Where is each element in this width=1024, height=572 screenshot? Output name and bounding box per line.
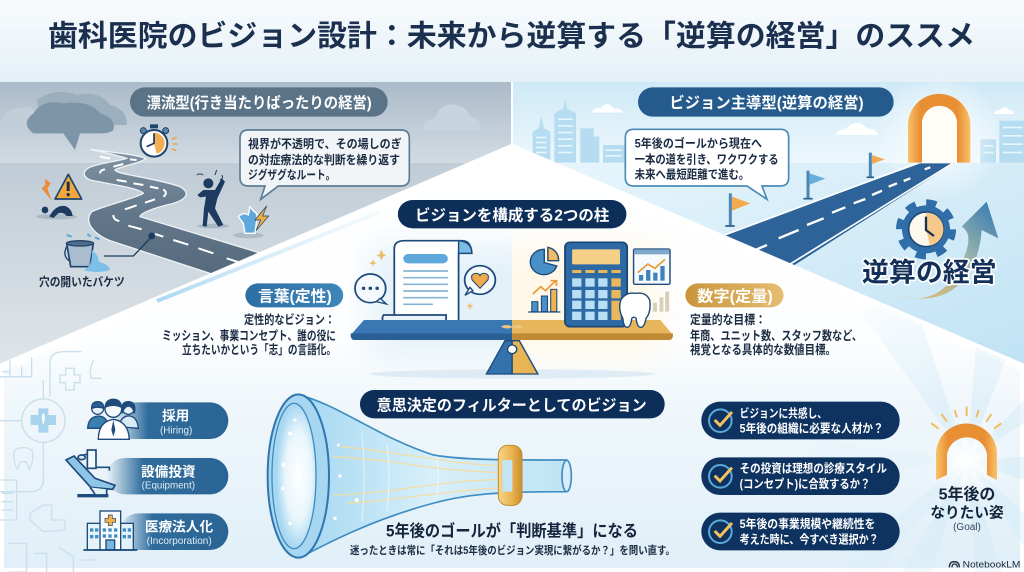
question 2 (701, 457, 900, 495)
pill: incorporation: 医療法人化 (145, 519, 213, 535)
callout: vision: 未来へ最短距離で進む。 (635, 166, 749, 181)
light cloud (423, 104, 481, 130)
pill: hiring: 採用 (162, 409, 189, 424)
fulcrum (486, 341, 538, 374)
callout: drifting: ジグザグなルート。 (248, 167, 335, 182)
panel: two pillars and filter background (0, 148, 1024, 572)
question 3: 考えた時に、今すべき選択か？ (740, 532, 879, 546)
text: quantitative goals: 定量的な目標： (690, 312, 766, 327)
icon: heart bubble (465, 266, 495, 295)
icon: gear clock (900, 203, 952, 255)
pill: words: 言葉(定性) (258, 287, 332, 305)
panel: vision led management (513, 73, 1024, 372)
balance beam (351, 320, 673, 340)
goal text: 5年後の (939, 484, 995, 503)
question 2: その投資は理想の診療スタイル (740, 462, 887, 476)
pill: equipment (107, 458, 228, 494)
pill: equipment: 設備投資 (141, 463, 196, 479)
callout: vision: 一本の道を引き、ワクワクする (635, 151, 779, 166)
icon: chart window (634, 249, 670, 284)
icon: dental chair (66, 450, 115, 496)
callout: vision (625, 129, 789, 199)
leader dot (148, 233, 155, 239)
icon: broken tooth with lightning (233, 206, 269, 238)
title band (0, 0, 1024, 82)
goal text (930, 484, 1004, 533)
pill: hiring (113, 402, 228, 439)
icon: leaky bucket (65, 234, 110, 272)
heading pill: drifting: 漂流型(行き当たりばったりの経営) (147, 94, 372, 112)
icon: calculator (565, 242, 627, 327)
city skyline (533, 98, 1024, 163)
pill: numbers: 数字(定量) (697, 288, 773, 305)
panel: decision questions and goal (701, 293, 1024, 572)
filter message: 迷ったときは常に「それは5年後のビジョン実現に繋がるか？」を問い直す。 (350, 544, 675, 557)
icon: warning sign and fallen person (36, 174, 82, 219)
icon: goal arch (931, 407, 1001, 480)
icon: vision funnel (268, 394, 571, 558)
pill: hiring: (Hiring) (160, 425, 192, 436)
callout: drifting: 視界が不透明で、その場しのぎ (248, 136, 402, 151)
heading pill: drifting (130, 87, 388, 117)
pill: incorporation: (Incorporation) (147, 536, 212, 547)
bucket label: 穴の開いたバケツ (39, 274, 125, 289)
callout: drifting: の対症療法的な判断を繰り返す (248, 152, 400, 167)
heading pill: vision: ビジョン主導型(逆算の経営) (669, 94, 864, 112)
callout: vision: 5年後のゴールから現在へ (635, 136, 762, 151)
panel: two pillars (245, 200, 784, 379)
callout: drifting (240, 130, 409, 199)
decorative icons faint (0, 352, 102, 572)
winding road (84, 149, 267, 277)
text: qualitative vision: 定性的なビジョン： (244, 312, 335, 327)
pill: incorporation (120, 513, 228, 550)
heading pill: filter: 意思決定のフィルターとしてのビジョン (377, 397, 647, 415)
title: 歯科医院のビジョン設計：未来から逆算する「逆算の経営」のススメ (48, 20, 975, 53)
pill: words (245, 283, 343, 307)
arrow (897, 202, 998, 299)
text: qualitative vision: ミッション、事業コンセプト、誰の役に (162, 328, 336, 343)
panel: decision filter (0, 352, 675, 572)
reverse management label: 逆算の経営 (862, 258, 997, 288)
question 1: ビジョンに共感し、 (740, 406, 827, 420)
panel: drifting management (0, 82, 511, 372)
dark cloud (0, 92, 127, 150)
icon: stressed person (197, 170, 229, 228)
question 1: 5年後の組織に必要な人材か？ (740, 422, 884, 436)
question 2: (コンセプト)に合致するか？ (740, 477, 870, 491)
text: quantitative goals (690, 312, 862, 357)
question 1 (701, 402, 900, 439)
text: quantitative goals: 年商、ユニット数、スタッフ数など、 (690, 328, 862, 343)
icon: hospital (83, 511, 137, 550)
icon: scroll (382, 241, 472, 327)
icon: staff (88, 399, 138, 439)
right panel foreground: reverse management badge (862, 202, 998, 299)
blue road (719, 163, 954, 267)
heading pill: vision (638, 87, 894, 117)
clouds (592, 104, 1014, 135)
filter message (350, 521, 675, 557)
goal text: (Goal) (953, 522, 981, 533)
icon: stopwatch (140, 124, 178, 157)
sun glow (876, 73, 1003, 200)
leader line (104, 237, 152, 256)
icon: bar chart (528, 281, 560, 312)
icon: speech bubble (355, 274, 386, 304)
sun rays (875, 313, 1024, 572)
question 3: 5年後の事業規模や継続性を (740, 517, 875, 531)
goal glow (924, 417, 1010, 503)
pill: equipment: (Equipment) (142, 480, 195, 491)
filter message: 5年後のゴールが「判断基準」になる (386, 521, 638, 541)
text: quantitative goals: 視覚となる具体的な数値目標。 (690, 342, 836, 357)
sparkles (369, 249, 474, 310)
flags (725, 153, 885, 226)
icon: tooth (620, 293, 650, 327)
icon: pie chart (530, 247, 559, 275)
text: qualitative vision (162, 312, 336, 357)
icon: golden arch (908, 94, 970, 163)
faded bars (655, 292, 667, 312)
heading pill: filter (360, 390, 665, 418)
question 3 (701, 513, 900, 550)
pill: numbers (685, 283, 784, 307)
heading pill: pillars (398, 200, 626, 228)
notebooklm mark: NotebookLM (963, 560, 1020, 570)
text: qualitative vision: 立ちたいかという「志」の言語化。 (182, 342, 336, 357)
shadow (369, 369, 655, 379)
goal text: なりたい姿 (930, 504, 1004, 521)
heading pill: pillars: ビジョンを構成する2つの柱 (415, 206, 609, 225)
